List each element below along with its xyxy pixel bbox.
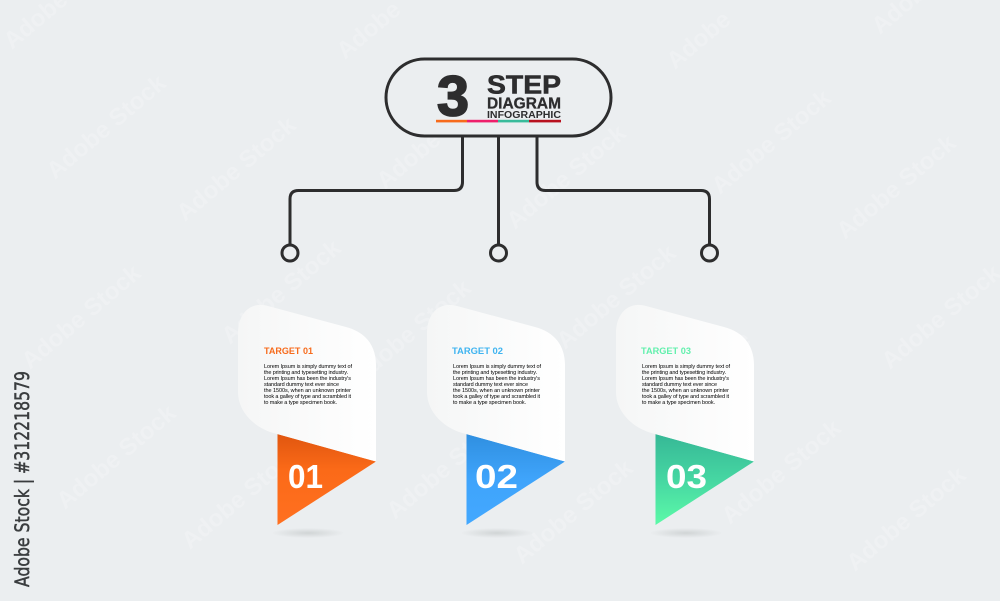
body text bbox=[642, 364, 730, 406]
number: 01 bbox=[288, 458, 323, 495]
floor shadow bbox=[650, 528, 722, 538]
heading: TARGET 01 bbox=[264, 346, 313, 356]
connector: right bbox=[537, 136, 710, 245]
body text: Lorem Ipsum has been the industry's bbox=[642, 376, 729, 382]
title pill bbox=[386, 59, 611, 136]
side credit: Adobe Stock | #312218579 bbox=[11, 371, 34, 587]
body text: Lorem Ipsum is simply dummy text of bbox=[453, 364, 541, 370]
watermarks: Adobe Stock bbox=[382, 409, 512, 525]
body text: the 1500s, when an unknown printer bbox=[642, 388, 729, 394]
number: 02 bbox=[475, 458, 518, 495]
colour stripe bbox=[436, 120, 561, 122]
body text: the printing and typesetting industry. bbox=[642, 370, 726, 376]
watermarks: Adobe Stock bbox=[217, 234, 347, 350]
body text: the printing and typesetting industry. bbox=[264, 370, 348, 376]
watermarks: Adobe bbox=[662, 6, 736, 75]
card panel bbox=[616, 305, 754, 462]
body text bbox=[453, 364, 541, 406]
body text: the 1500s, when an unknown printer bbox=[453, 388, 540, 394]
watermarks: Adobe Stock bbox=[347, 274, 477, 390]
node: centre bbox=[490, 245, 506, 261]
body text: the 1500s, when an unknown printer bbox=[264, 388, 351, 394]
body text: took a galley of type and scrambled it bbox=[264, 394, 351, 400]
step card 01 bbox=[238, 305, 376, 538]
watermarks: Adobe Stock bbox=[717, 414, 847, 530]
body text: standard dummy text ever since bbox=[453, 382, 528, 388]
body text: Lorem Ipsum has been the industry's bbox=[453, 376, 540, 382]
watermarks: Adobe Stock bbox=[832, 129, 962, 245]
connector: centre bbox=[497, 136, 500, 245]
body text: the printing and typesetting industry. bbox=[453, 370, 537, 376]
step card 02 bbox=[427, 305, 565, 538]
connector: left bbox=[290, 136, 462, 245]
body text: to make a type specimen book. bbox=[453, 400, 526, 406]
floor shadow bbox=[461, 528, 533, 538]
body text: to make a type specimen book. bbox=[264, 400, 337, 406]
number triangle bbox=[278, 434, 376, 525]
heading: TARGET 03 bbox=[641, 346, 691, 356]
watermarks: Adobe Stock bbox=[842, 461, 972, 577]
connector lines bbox=[282, 136, 718, 261]
watermarks: Adobe Stock bbox=[42, 69, 172, 185]
watermarks: Adobe Stock bbox=[552, 239, 682, 355]
body text bbox=[264, 364, 352, 406]
body text: Lorem Ipsum is simply dummy text of bbox=[264, 364, 352, 370]
floor shadow bbox=[272, 528, 344, 538]
card panel bbox=[427, 305, 565, 462]
body text: to make a type specimen book. bbox=[642, 400, 715, 406]
watermarks: Adobe Stock bbox=[707, 84, 837, 200]
body text: Lorem Ipsum is simply dummy text of bbox=[642, 364, 730, 370]
node: right bbox=[702, 245, 718, 261]
body text: took a galley of type and scrambled it bbox=[453, 394, 540, 400]
number: 03 bbox=[666, 458, 707, 495]
body text: Lorem Ipsum has been the industry's bbox=[264, 376, 351, 382]
card panel bbox=[238, 305, 376, 462]
node: left bbox=[282, 245, 298, 261]
watermarks: Adobe Stock bbox=[17, 259, 147, 375]
body text: standard dummy text ever since bbox=[642, 382, 717, 388]
watermarks: Adobe Stock bbox=[172, 111, 302, 227]
title: infographic: INFOGRAPHIC bbox=[487, 109, 561, 121]
number triangle bbox=[656, 434, 754, 525]
watermarks: Adobe Stock bbox=[177, 439, 307, 555]
watermarks: Adobe bbox=[682, 326, 756, 395]
step card 03 bbox=[616, 305, 754, 538]
heading: TARGET 02 bbox=[452, 346, 503, 356]
watermarks: Adobe Stock bbox=[509, 454, 639, 570]
title: step: STEP bbox=[487, 70, 561, 100]
watermarks: Adobe Stock bbox=[52, 399, 182, 515]
body text: standard dummy text ever since bbox=[264, 382, 339, 388]
watermarks: Adobe bbox=[372, 126, 446, 195]
number triangle bbox=[466, 434, 565, 525]
watermarks: Adobe Stock bbox=[502, 119, 632, 235]
body text: took a galley of type and scrambled it bbox=[642, 394, 729, 400]
title: diagram: DIAGRAM bbox=[487, 96, 561, 112]
numeral 3: 3 bbox=[437, 64, 469, 128]
